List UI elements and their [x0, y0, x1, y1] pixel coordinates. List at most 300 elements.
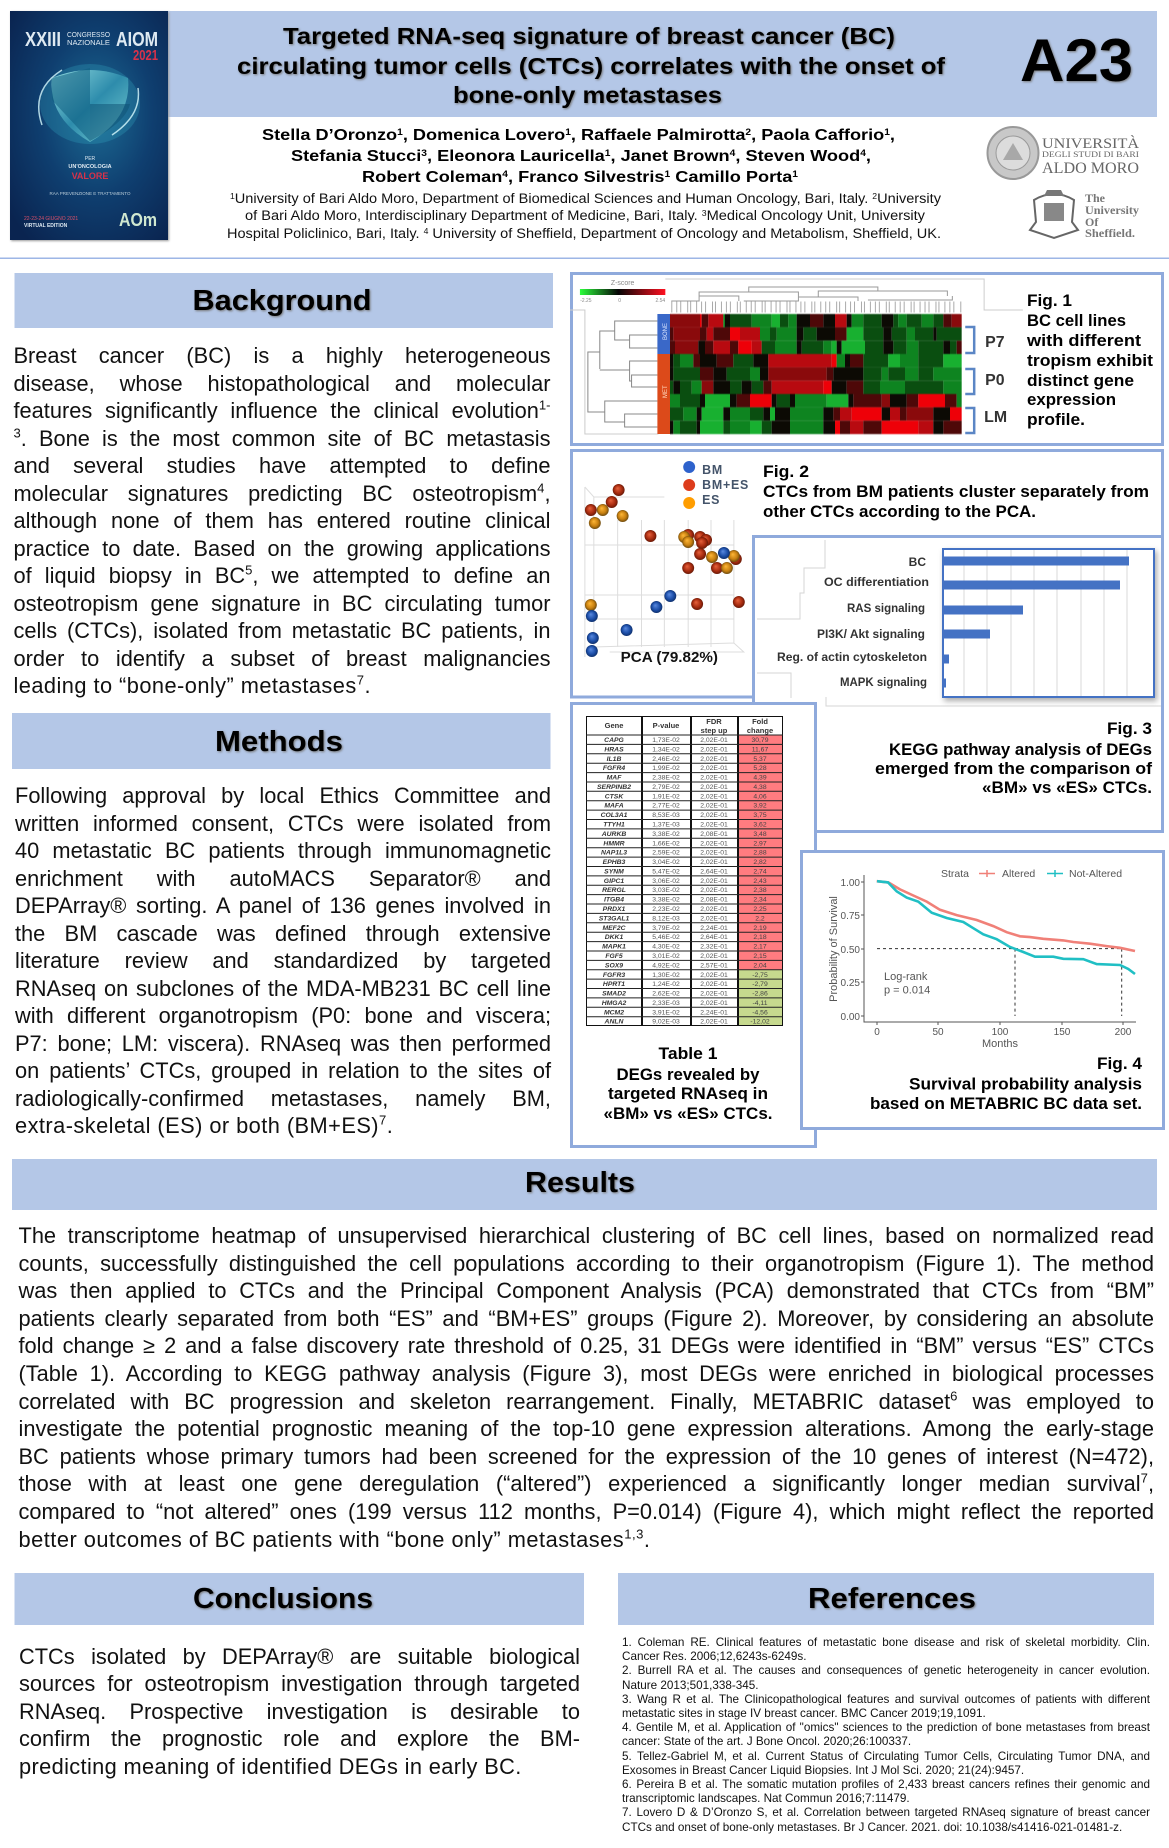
heading: Methods — [12, 713, 550, 769]
conference poster thumbnail: VIRTUAL EDITION — [24, 223, 68, 229]
authors: 3 — [421, 148, 427, 158]
logo: University of Sheffield: The — [1085, 191, 1106, 205]
DEG table: step up — [701, 726, 728, 735]
DEG table: EPHB3 — [603, 859, 626, 866]
PCA legend: ES — [702, 493, 720, 507]
text block: References — [622, 1636, 1150, 1834]
text block: Conclusions: CTCs isolated by DEPArray® are suitable biological — [19, 1644, 580, 1669]
Fig. 3 caption: KEGG pathway analysis of DEGs — [889, 741, 1152, 759]
heading: Results: Results — [525, 1167, 635, 1199]
text block: Methods: radiologically-confirmed metastases, namely BM, — [15, 1086, 551, 1110]
text block: References: Nature 2013;501,338-345. — [622, 1679, 758, 1692]
authors: 1 — [884, 127, 890, 137]
DEG table: change — [747, 726, 773, 735]
logo: University of Sheffield: University — [1085, 203, 1139, 217]
text block: References: 1. Coleman RE. Clinical features of metastatic bone disease and risk of skeletal morbidity. Clin. — [622, 1636, 1150, 1649]
Fig. 3 caption — [875, 720, 1153, 797]
text block: References: transcriptomic landscapes. Nat Commun 2016;7:11479. — [622, 1792, 910, 1805]
authors: 1 — [605, 148, 610, 158]
DEG table: 2,02E-01 — [700, 1000, 728, 1007]
KEGG bar chart — [777, 549, 1154, 697]
DEG table: 2,02E-01 — [700, 803, 728, 810]
Fig. 1 caption — [1026, 292, 1154, 429]
panel: Table 1 DEGs — [572, 704, 816, 1146]
Fig. 3 caption: Fig. 3 — [1107, 720, 1152, 738]
KEGG bar chart: OC differentiation — [824, 575, 929, 589]
DEG table: FGFR3 — [603, 972, 625, 979]
cluster bracket LM — [965, 408, 1007, 433]
Kaplan-Meier chart: 200 — [1115, 1027, 1132, 1038]
DEG table: 2,02E-01 — [700, 1019, 728, 1026]
DEG table: 2,02E-01 — [700, 756, 728, 763]
text block: Methods: written informed consent, CTCs were isolated from — [15, 810, 551, 836]
text block: Background: Breast cancer (BC) is a highly heterogeneous — [14, 343, 550, 368]
DEG table: TTYH1 — [603, 822, 625, 828]
text block: References: CTCs and onset of bone-only metastases. Br J Cancer. 2021. doi: 10.1038/s41416-021-01481-z. — [622, 1821, 1122, 1834]
DEG table: HMMR — [603, 840, 625, 847]
authors: 4 — [730, 148, 735, 158]
DEG table: 5,28 — [753, 765, 767, 772]
DEG table: MAPK1 — [602, 944, 626, 951]
Kaplan-Meier chart: 0.25 — [841, 978, 860, 989]
DEG table: 2,25 — [753, 906, 767, 913]
DEG table: 2,23E-02 — [652, 906, 680, 913]
DEG table: 2,2 — [755, 915, 765, 922]
text block: Background: molecular signatures predicting BC osteotropism4, — [14, 480, 550, 506]
conference poster thumbnail: 22-23-24 GIUGNO 2021 — [24, 216, 78, 222]
DEG table: 11,67 — [752, 746, 768, 753]
DEG table: 2,02E-01 — [700, 981, 728, 988]
DEG table: 3,04E-02 — [652, 859, 680, 866]
DEG table: 2,08E-01 — [700, 897, 728, 904]
DEG table: 2,18 — [753, 934, 767, 941]
logo: Università degli Studi di Bari Aldo Moro — [988, 127, 1139, 179]
Kaplan-Meier chart: 50 — [932, 1027, 944, 1038]
DEG table: 2,62E-02 — [652, 990, 680, 998]
DEG table: 3,06E-02 — [652, 878, 680, 885]
conference poster thumbnail: AOm — [119, 210, 157, 230]
DEG table: 1,73E-02 — [652, 737, 680, 744]
DEG table: Gene — [605, 721, 623, 730]
DEG table: 2,19 — [753, 925, 767, 932]
text block: Results: was then applied to CTCs and the Principal Component Analysis (PCA) demonstrated that CTCs from “BM” — [18, 1278, 1154, 1303]
DEG table: 5,37 — [753, 756, 767, 763]
affiliations: University — [877, 191, 941, 206]
conference poster thumbnail: VALORE — [72, 171, 108, 181]
DEG table: 3,92 — [753, 803, 767, 810]
DEG table: 2,04 — [753, 962, 767, 969]
DEG table: 2,02E-01 — [700, 775, 728, 782]
text block: Results: The transcriptome heatmap of unsupervised hierarchical clustering of BC cell lines, based on normalized read — [18, 1223, 1154, 1248]
affiliations: University of Bari Aldo Moro, Department of Biomedical Sciences and Human Oncology, Bari, Italy. — [235, 191, 872, 206]
text block: References: 5. Tellez-Gabriel M, et al. Current Status of Circulating Tumor Cells, Circulating Tumor DNA, and — [622, 1750, 1150, 1763]
Table 1 caption: targeted RNAseq in — [608, 1084, 768, 1103]
authors: Robert Coleman — [362, 169, 486, 186]
authors: Camillo Porta — [670, 169, 792, 186]
DEG table: -12,02 — [750, 1019, 770, 1026]
KEGG bar chart: PI3K/ Akt signaling — [817, 627, 925, 641]
DEG table: 3,38E-02 — [652, 897, 680, 904]
Fig. 1 caption: with different — [1026, 332, 1142, 350]
Fig. 3 caption: emerged from the comparison of — [875, 760, 1153, 778]
DEG table: 5,47E-02 — [652, 868, 680, 876]
logo: Università degli Studi di Bari Aldo Moro: UNIVERSITÀ — [1042, 135, 1139, 152]
DEG table: FDR — [706, 717, 722, 726]
Kaplan-Meier chart: Strata — [941, 868, 969, 880]
z-score colour key: Z-score — [611, 280, 635, 287]
Kaplan-Meier chart: Probability of Survival — [828, 896, 840, 1002]
DEG table: 2,24E-01 — [700, 925, 728, 932]
DEG table: 2,02E-01 — [700, 784, 728, 791]
Kaplan-Meier chart: 0.75 — [841, 911, 860, 922]
Fig. 1 caption: BC cell lines — [1027, 312, 1126, 330]
Fig. 1 caption: distinct gene — [1027, 372, 1134, 390]
DEG table: -2,86 — [752, 990, 768, 998]
DEG table: 1,34E-02 — [652, 746, 680, 753]
DEG table: P-value — [653, 721, 679, 730]
Kaplan-Meier chart: 0 — [874, 1027, 880, 1038]
DEG table: 2,02E-01 — [700, 850, 728, 857]
DEG table: 8,53E-03 — [652, 812, 680, 819]
authors: Stefania Stucci — [291, 148, 406, 165]
text block: Methods: literature review and standardized by targeted — [15, 948, 551, 973]
Kaplan-Meier chart: Months — [982, 1038, 1019, 1050]
heading: Background: Background — [192, 285, 372, 317]
heading: References: References — [808, 1583, 976, 1615]
DEG table: 2,02E-01 — [700, 990, 728, 998]
DEG table: 2,64E-01 — [700, 868, 728, 876]
DEG table: GIPC1 — [604, 878, 624, 885]
text block: Results: counts, successfully distinguished the cell populations according to their organotropism (Figure 1). The method — [18, 1251, 1154, 1276]
text block: References: 4. Gentile M, et al. Application of "omics" sciences to the prediction of bone metastases from breast — [622, 1721, 1150, 1734]
row dendrogram — [588, 321, 657, 427]
panel: Fig. 1 heatmap — [570, 274, 1162, 444]
Fig. 1 caption: Fig. 1 — [1027, 292, 1072, 310]
DEG table: 30,79 — [751, 737, 769, 744]
DEG table: 2,33E-03 — [652, 1000, 680, 1007]
text block: Methods: enrichment with autoMACS Separator® and — [15, 866, 551, 890]
text block: Background: cells (CTCs), isolated from metastatic BC patients, in — [14, 618, 550, 643]
heading: Conclusions — [14, 1573, 584, 1625]
KEGG bar chart: Reg. of actin cytoskeleton — [777, 650, 927, 664]
text block: Methods: extra-skeletal (ES) or both (BM+ES)7. — [15, 1113, 393, 1138]
DEG table: 2,43 — [753, 878, 767, 885]
title band — [168, 11, 1157, 117]
text block: Background: features significantly influence the clinical evolution1- — [14, 398, 550, 423]
heading: Conclusions: Conclusions — [193, 1583, 373, 1615]
affiliations: of Bari Aldo Moro, Interdisciplinary Department of Medicine, Bari, Italy. — [245, 208, 663, 223]
DEG table: MAFA — [604, 803, 624, 810]
DEG table: HPRT1 — [603, 981, 625, 988]
text block: References: metastatic sites in stage IV breast cancer. BMC Cancer 2019;19,1091. — [622, 1707, 986, 1720]
DEG table: 1,99E-02 — [652, 765, 680, 772]
DEG table: 1,66E-02 — [652, 840, 680, 847]
authors — [262, 127, 895, 186]
DEG table: 1,30E-02 — [652, 972, 680, 979]
PCA legend: BM+ES — [702, 478, 749, 492]
conference poster thumbnail: CONGRESSO — [67, 32, 111, 39]
PCA legend: BM — [702, 463, 723, 477]
DEG table — [586, 716, 783, 1026]
authors: 1 — [397, 127, 403, 137]
affiliations: 1 — [230, 192, 235, 201]
authors: , Paola Cafforio — [751, 127, 885, 144]
affiliations: 3 — [702, 209, 707, 218]
DEG table: FGF5 — [605, 953, 623, 960]
DEG table: 1,37E-03 — [652, 822, 680, 828]
text block: Results: correlated with BC progression and skeleton rearrangement. Finally, METABRIC dataset6 was employed to — [18, 1388, 1154, 1414]
Fig. 2 caption: Fig. 2 — [763, 463, 809, 481]
DEG table: 2,02E-01 — [700, 953, 728, 960]
column dendrogram — [671, 287, 961, 307]
panel: Fig. 4 survival — [802, 852, 1164, 1128]
text block: Conclusions: RNAseq. Prospective investigation is desirable to — [19, 1699, 580, 1724]
panel: Fig. 3 KEGG pathway analysis — [754, 536, 1162, 832]
logo: University of Sheffield — [1030, 190, 1139, 240]
authors: , Janet Brown — [610, 148, 730, 165]
DEG table: 4,39 — [753, 775, 767, 782]
logo: Università degli Studi di Bari Aldo Moro: ALDO MORO — [1042, 160, 1139, 177]
Kaplan-Meier chart: 0.00 — [841, 1012, 860, 1023]
text block: References: 2. Burrell RA et al. The causes and consequences of genetic heterogeneity in cancer evolution. — [622, 1664, 1150, 1677]
Kaplan-Meier chart: p = 0.014 — [884, 984, 930, 996]
Fig. 4 caption: Survival probability analysis — [909, 1076, 1142, 1094]
text block: Conclusions: confirm the prognostic role and explore the BM- — [19, 1726, 580, 1751]
DEG table: -4,56 — [752, 1009, 768, 1016]
PCA axis label: PCA (79.82%) — [621, 650, 718, 666]
Kaplan-Meier chart: 0.50 — [841, 945, 860, 956]
cluster bracket P0: P0 — [985, 372, 1005, 389]
affiliations: University of Sheffield, Department of Oncology and Metabolism, Sheffield, UK. — [428, 226, 941, 241]
authors: , Eleonora Lauricella — [427, 148, 605, 165]
DEG table: 2,64E-01 — [700, 934, 728, 941]
conference poster thumbnail — [10, 11, 168, 240]
DEG table: CTSK — [605, 793, 624, 800]
DEG table: 2,24E-01 — [700, 1009, 728, 1016]
conference poster thumbnail: RAA PREVENZIONE E TRATTAMENTO — [50, 191, 131, 196]
authors: 2 — [745, 127, 751, 137]
DEG table: PRDX1 — [603, 906, 626, 913]
conference poster thumbnail: 2021 — [133, 47, 158, 64]
DEG table: -2,79 — [752, 981, 768, 988]
text block: Background: 3. Bone is the most common site of BC metastasis — [14, 425, 550, 450]
text block: Methods: DEPArray® sorting. A panel of 136 genes involved in — [15, 893, 551, 918]
text block: Background: order to identify a subset of breast malignancies — [14, 646, 550, 670]
DEG table: SMAD2 — [602, 990, 626, 998]
DEG table: 3,38E-02 — [652, 831, 680, 838]
authors: 1 — [565, 127, 571, 137]
poster code A23: A23 — [1020, 27, 1133, 94]
cluster bracket P7 — [965, 327, 1005, 353]
DEG table: 2,82 — [753, 859, 767, 866]
DEG table: 2,97 — [753, 840, 767, 847]
cluster bracket P0 — [965, 369, 1005, 394]
text block: Methods: the BM cascade was defined through extensive — [15, 920, 551, 946]
text block: References: Cancer Res. 2006;12,6243s-6249s. — [622, 1650, 807, 1663]
conference poster thumbnail: UN'ONCOLOGIA — [68, 164, 112, 170]
DEG table: FGFR4 — [603, 765, 625, 772]
text block: Background: practice to date. Based on the growing applications — [14, 536, 550, 560]
DEG table: 2,77E-02 — [652, 803, 680, 810]
DEG table: -4,11 — [752, 1000, 768, 1007]
z-score colour key: -2.25 — [580, 298, 592, 304]
DEG table: HMGA2 — [602, 1000, 626, 1007]
Fig. 4 caption: Fig. 4 — [1097, 1055, 1143, 1073]
KEGG bar chart: MAPK signaling — [840, 675, 927, 689]
z-score colour key: 0 — [618, 298, 621, 304]
text block: References: 7. Lovero D & D’Oronzo S, et al. Correlation between targeted RNAseq signature of breast cancer — [622, 1806, 1150, 1819]
Kaplan-Meier chart: 150 — [1054, 1027, 1071, 1038]
DEG table: RERGL — [602, 887, 626, 894]
authors: , Steven Wood — [735, 148, 860, 165]
title — [237, 23, 945, 108]
z-score colour key — [580, 280, 665, 304]
authors: , Raffaele Palmirotta — [571, 127, 746, 144]
Kaplan-Meier chart: 100 — [992, 1027, 1009, 1038]
DEG table: 3,48 — [753, 831, 767, 838]
DEG table: 2,02E-01 — [700, 887, 728, 894]
z-score colour key: 2.54 — [656, 298, 665, 304]
PCA scatter: BM+ES points — [585, 484, 745, 610]
DEG table: Fold — [752, 717, 768, 726]
conference poster thumbnail: AIOM — [116, 29, 158, 51]
DEG table: 2,02E-01 — [700, 915, 728, 922]
KEGG bar chart: BC — [909, 555, 926, 569]
Fig. 2 caption: other CTCs according to the PCA. — [763, 503, 1036, 521]
text block: Results: BC patients whose primary tumors had been screened for the expression of the 10 genes of interest (N=472), — [18, 1444, 1154, 1469]
DEG table: 2,02E-01 — [700, 840, 728, 847]
DEG table: SYNM — [604, 868, 624, 876]
authors: Stella D’Oronzo — [262, 127, 381, 144]
DEG table: 3,75 — [753, 812, 767, 819]
conference poster thumbnail: XXIII — [25, 29, 61, 51]
Fig. 1 caption: profile. — [1027, 411, 1085, 429]
DEG table: 2,02E-01 — [700, 737, 728, 744]
Fig. 3 caption: «BM» vs «ES» CTCs. — [982, 779, 1152, 797]
PCA scatter: ES points — [585, 504, 740, 611]
DEG table: 2,88 — [753, 850, 767, 857]
DEG table: ITGB4 — [604, 897, 624, 904]
DEG table: DKK1 — [605, 934, 623, 941]
DEG table: 2,38 — [753, 887, 767, 894]
PCA legend — [683, 461, 749, 509]
text block: Background: osteotropism gene signature in BC circulating tumor — [14, 590, 550, 616]
DEG table: 5,46E-02 — [652, 934, 680, 941]
conference poster thumbnail: NAZIONALE — [67, 40, 110, 47]
authors: , — [866, 148, 871, 165]
DEG table: 3,79E-02 — [652, 925, 680, 932]
affiliations: Hospital Policlinico, Bari, Italy. — [227, 226, 406, 241]
DEG table: 2,08E-01 — [700, 831, 728, 838]
DEG table: HRAS — [604, 746, 624, 753]
text block: Conclusions: sources for osteotropism investigation through targeted — [19, 1671, 580, 1696]
DEG table: 1,91E-02 — [652, 793, 680, 800]
DEG table: 2,02E-01 — [700, 793, 728, 800]
DEG table: 2,59E-02 — [652, 850, 680, 857]
authors: 1 — [664, 169, 670, 179]
text block: Results: (Table 1). According to KEGG pathway analysis (Figure 3), most DEGs were enriched in biological processes — [18, 1361, 1154, 1386]
DEG table: 2,46E-02 — [652, 756, 680, 763]
text block: Results: investigate the potential prognostic meaning of the top-10 gene expression alterations. Among the early-stage — [18, 1416, 1154, 1441]
text block: Methods: 40 metastatic BC patients through immunomagnetic — [15, 838, 551, 863]
text block: Background: and several studies have attempted to define — [14, 453, 550, 478]
text block: Results — [18, 1223, 1154, 1552]
DEG table: 2,02E-01 — [700, 822, 728, 828]
DEG table: MEF2C — [602, 925, 626, 932]
Fig. 2 caption: CTCs from BM patients cluster separately from — [763, 483, 1149, 501]
text block: Methods: Following approval by local Ethics Committee and — [15, 783, 551, 808]
DEG table: 2,02E-01 — [700, 859, 728, 866]
text block: Results: those with at least one gene deregulation (“altered”) experienced a significantly longer median survival7, — [18, 1471, 1154, 1496]
conference poster thumbnail: PER — [85, 156, 96, 162]
Fig. 4 caption: based on METABRIC BC data set. — [870, 1095, 1142, 1113]
affiliations: 4 — [424, 227, 429, 236]
Fig. 1 caption: tropism exhibit — [1027, 352, 1154, 370]
DEG table: MAF — [607, 775, 622, 782]
PCA 3D grid — [585, 487, 744, 657]
DEG table: COL3A1 — [601, 812, 628, 819]
Table 1 caption: DEGs revealed by — [616, 1065, 760, 1084]
DEG table: 4,92E-02 — [652, 962, 680, 969]
sample group bars: MET — [663, 385, 669, 398]
DEG table: SERPINB2 — [597, 784, 631, 791]
PCA scatter: BM points — [586, 547, 730, 657]
DEG table: NAP1L3 — [601, 850, 627, 857]
text block: Methods — [15, 783, 552, 1138]
logo: University of Sheffield: Of — [1085, 215, 1099, 229]
Table 1 caption — [604, 1044, 772, 1123]
DEG table: 2,34 — [753, 897, 767, 904]
DEG table: AURKB — [601, 831, 626, 838]
DEG table: 2,79E-02 — [652, 784, 680, 791]
text block: Results: compared to “not altered” ones (199 versus 112 months, P=0.014) (Figure 4), which might reflect the reported — [18, 1499, 1154, 1524]
DEG table: ANLN — [604, 1019, 625, 1026]
DEG table: CAPG — [604, 737, 625, 744]
Kaplan-Meier chart: 1.00 — [841, 878, 860, 889]
text block: Methods: on patients’ CTCs, grouped in relation to the sites of — [15, 1058, 551, 1083]
heading: References — [618, 1573, 1154, 1625]
DEG table: 2,15 — [753, 953, 767, 960]
Fig. 4 caption — [870, 1055, 1143, 1113]
authors: , Domenica Lovero — [403, 127, 565, 144]
heading: Methods: Methods — [215, 726, 343, 758]
text block: Conclusions — [19, 1644, 580, 1779]
text block: Results: patients clearly separated from both “ES” and “BM+ES” groups (Figure 2). Moreover, by considering an absolute — [18, 1306, 1154, 1331]
sample group bars — [657, 314, 670, 434]
DEG table: 3,91E-02 — [652, 1009, 680, 1016]
text block: Background: leading to “bone-only” metastases7. — [14, 673, 371, 698]
text block: Background: disease, whose histopathological and molecular — [14, 370, 550, 396]
authors: 1 — [792, 169, 798, 179]
text block: Conclusions: predicting meaning of identified DEGs in early BC. — [19, 1754, 522, 1779]
heading: Background — [14, 273, 553, 328]
text block: Background: of liquid biopsy in BC5, we attempted to define an — [14, 563, 550, 588]
text block: Results: better outcomes of BC patients with “bone only” metastases1,3. — [18, 1526, 650, 1552]
DEG table: 8,12E-03 — [652, 915, 680, 922]
authors: , Franco Silvestris — [508, 169, 665, 186]
affiliations: 2 — [872, 192, 878, 201]
title: circulating tumor cells (CTCs) correlates with the onset of — [237, 53, 945, 79]
affiliations — [227, 191, 941, 241]
DEG table: 2,17 — [753, 944, 767, 951]
sample group bars: BONE — [663, 323, 669, 340]
Table 1 caption: «BM» vs «ES» CTCs. — [604, 1104, 772, 1123]
title: bone-only metastases — [453, 82, 722, 108]
text block: References: 3. Wang R et al. The Clinicopathological features and survival outcomes of patients with different — [622, 1693, 1150, 1706]
DEG table: IL1B — [607, 756, 621, 763]
DEG table: 4,38 — [753, 784, 767, 791]
text block: Results: fold change ≥ 2 and a false discovery rate threshold of 0.25, 31 DEGs were identified in “BM” versus “ES” CTCs — [18, 1333, 1154, 1358]
